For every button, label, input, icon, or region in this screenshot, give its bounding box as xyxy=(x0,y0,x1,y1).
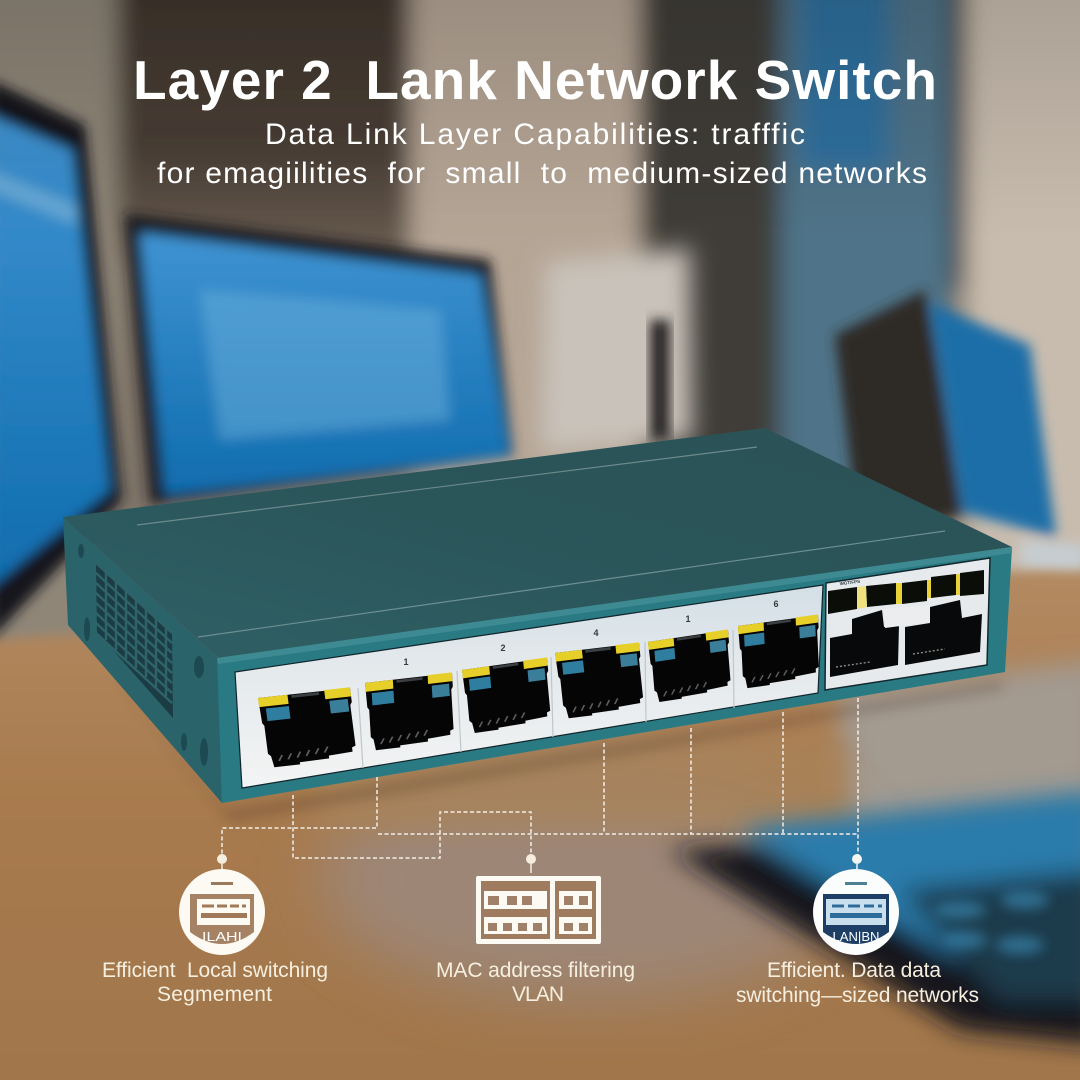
wooden desk xyxy=(0,565,1080,1080)
switch top cover xyxy=(63,428,1012,658)
port numbers: 1 xyxy=(685,614,691,624)
switch shadow xyxy=(100,660,1005,822)
large ports xyxy=(830,610,899,677)
right laptop xyxy=(835,290,1080,570)
caption: MAC filtering: MAC address filtering xyxy=(436,959,635,982)
white appliance xyxy=(540,248,692,452)
caption: data switching: Efficient. Data data xyxy=(767,959,941,982)
port 4 xyxy=(555,642,646,719)
centre monitor xyxy=(125,214,513,505)
icon: LAN network badge: LAN|BN xyxy=(832,929,880,944)
caption: local switching: Efficient Local switching xyxy=(102,959,328,982)
caption: data switching xyxy=(736,959,979,1007)
port 3 xyxy=(462,657,553,734)
uplink port panel xyxy=(825,558,990,690)
icon: MAC address table xyxy=(476,854,601,944)
icon: LAN switch badge: ILAHI xyxy=(202,929,242,944)
port numbers xyxy=(403,599,779,667)
port numbers: 1 xyxy=(403,657,409,667)
subtitle xyxy=(157,118,927,190)
blurred keyboard xyxy=(670,790,1080,1045)
left monitor xyxy=(0,80,122,640)
title: Layer 2 Lank Network Switch xyxy=(133,49,937,111)
network switch xyxy=(63,428,1012,803)
dashed connector lines xyxy=(222,698,858,858)
icon: LAN network badge xyxy=(813,854,899,955)
port numbers: 6 xyxy=(773,599,779,609)
port 6 xyxy=(738,614,821,689)
switch front bezel xyxy=(217,547,1012,803)
main port panel xyxy=(235,585,823,788)
port 2 xyxy=(365,672,456,751)
caption: local switching xyxy=(102,959,328,1006)
caption: local switching: Segmement xyxy=(157,983,272,1006)
caption: MAC filtering: VLAN xyxy=(512,983,564,1006)
caption: MAC filtering xyxy=(436,959,635,1006)
port numbers: 4 xyxy=(593,628,599,638)
uplink port panel: WGT/FPS xyxy=(839,579,860,586)
icon: LAN switch badge xyxy=(179,854,265,955)
subtitle: Data Link Layer Capabilities: trafffic xyxy=(265,118,805,151)
port 5 xyxy=(648,629,733,703)
subtitle: for emagiilities for small to medium-sized networks xyxy=(157,157,927,190)
switch left side with vents xyxy=(63,517,222,803)
port 1 xyxy=(258,687,359,768)
port numbers: 2 xyxy=(500,643,506,653)
caption: data switching: switching—sized networks xyxy=(736,984,979,1007)
small ports xyxy=(828,587,857,614)
